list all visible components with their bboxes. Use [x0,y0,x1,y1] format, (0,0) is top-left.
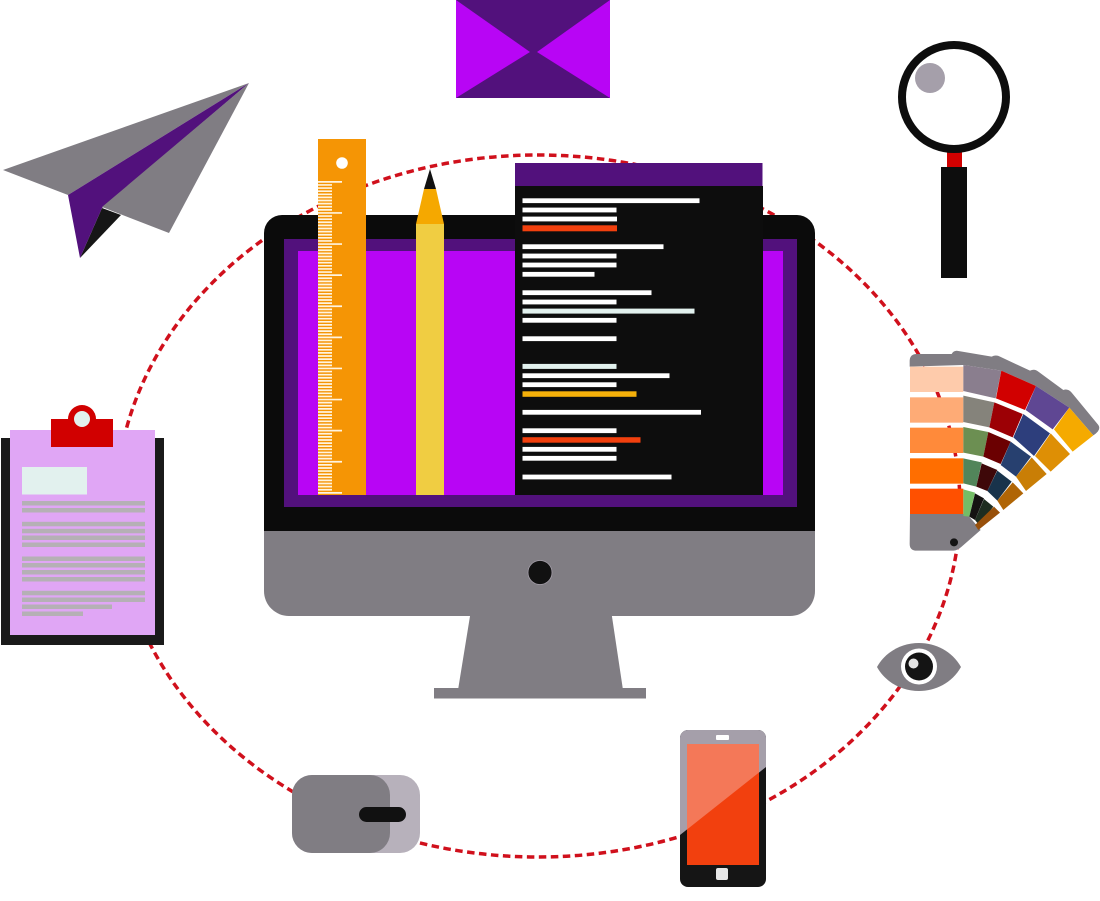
screen [298,251,783,495]
amber swatch strip [975,408,1093,530]
monitor bezel [264,215,815,531]
screen reflection [687,744,759,830]
ruler [318,139,366,495]
fan bottom grey handle [910,514,981,551]
window body [515,186,763,495]
orange swatch strip [910,367,963,514]
clipboard note box [22,467,87,494]
icon: wallet mouse [292,775,420,853]
window title bar [515,163,762,187]
clipboard clip [51,405,113,447]
fan top grey edge [910,351,1099,435]
phone home button [716,868,728,880]
phone speaker [716,735,729,740]
red swatch strip [969,371,1036,520]
icon: clipboard [1,405,164,645]
phone body [680,730,766,887]
clipboard paper [10,430,155,635]
icon: envelope [456,0,610,98]
monitor [264,215,815,698]
icon: colour swatch fan [910,351,1099,551]
icon: phone [680,730,766,887]
blue swatch strip [975,386,1069,525]
muted swatch strip [963,365,1001,517]
pencil [416,169,444,495]
clipboard board [1,438,164,645]
screen frame [284,239,797,507]
monitor button [528,560,552,584]
phone top reflection [680,730,766,835]
monitor chin [264,531,815,616]
dashed orbit ring [116,155,960,857]
code window [515,163,763,495]
icon: eye [877,643,961,691]
clipboard text lines [22,501,145,616]
monitor stand base [434,688,646,698]
icon: magnifying glass [902,45,1006,278]
code lines [522,198,701,479]
monitor stand [458,610,623,690]
handle rivet [950,538,958,546]
icon: paper plane [3,83,249,258]
phone screen [687,744,759,865]
